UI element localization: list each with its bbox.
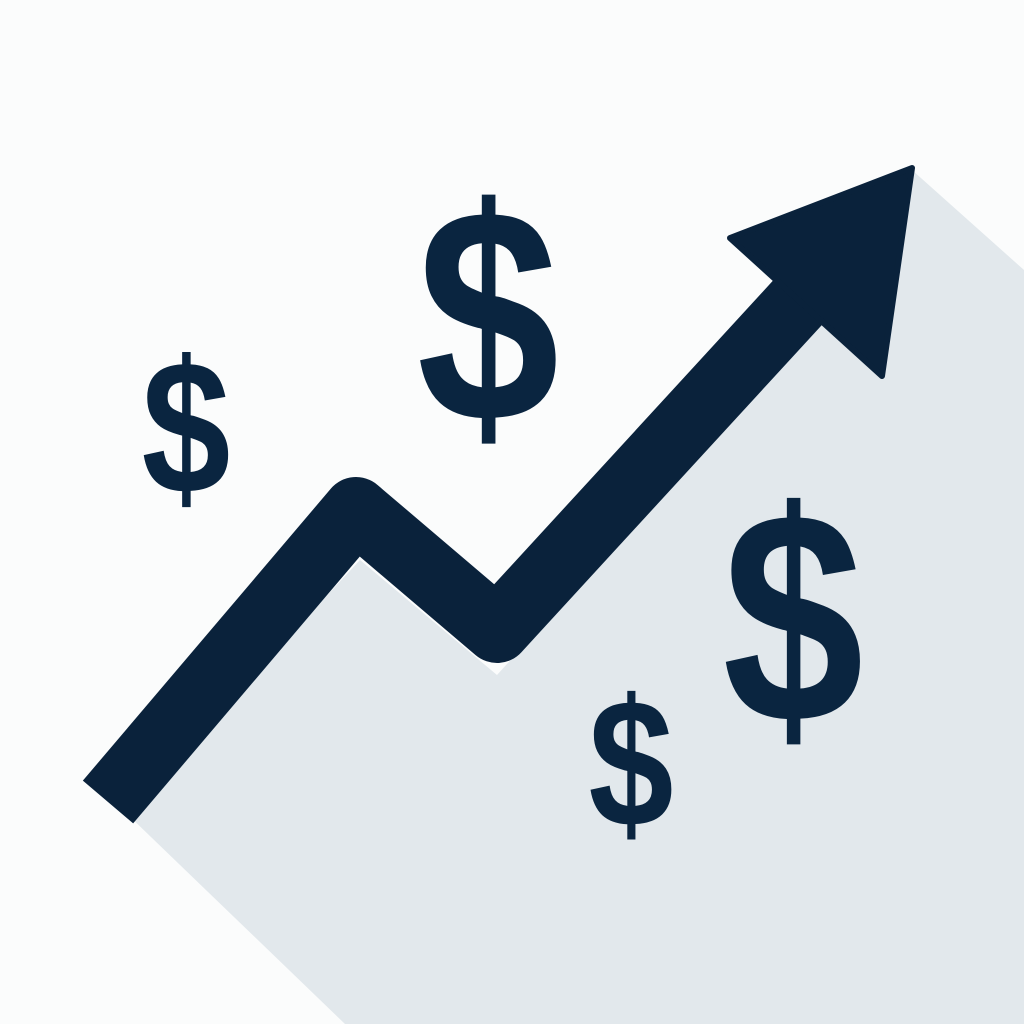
shadow under arrow bbox=[125, 170, 1024, 1024]
dollar sign: large center: $ bbox=[417, 145, 559, 486]
dollar sign: large right: $ bbox=[722, 450, 864, 787]
dollar signs bbox=[142, 145, 864, 865]
arrowhead bbox=[730, 168, 912, 376]
arrow: rising trend line bbox=[108, 168, 912, 802]
dollar sign: small bottom: $ bbox=[588, 661, 674, 865]
dollar sign: small left: $ bbox=[142, 322, 230, 534]
